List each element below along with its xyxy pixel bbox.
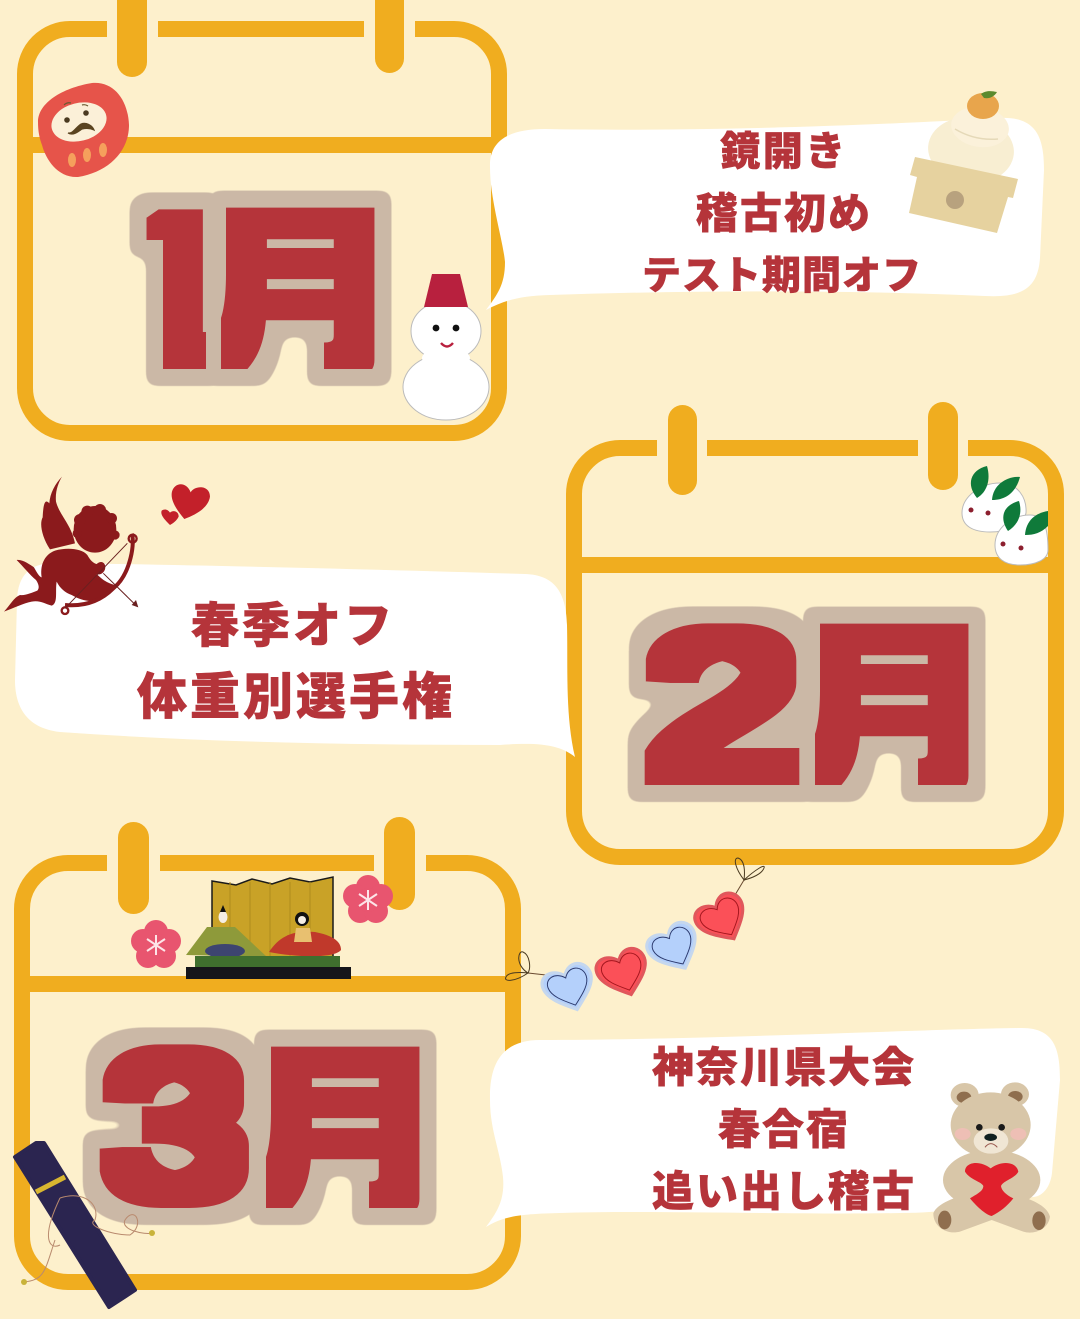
- garland: string of hearts: [506, 858, 764, 1018]
- panel: January calendar: [25, 0, 499, 433]
- speech bubble: March: [486, 1028, 1060, 1227]
- month label: 2月: 月: [779, 616, 1004, 795]
- month label: 3月: 3: [104, 1014, 246, 1238]
- month label: 1月: 1: [121, 178, 232, 401]
- month label: 2月: 2: [645, 594, 799, 817]
- panel: March calendar: [15, 817, 513, 1307]
- text: January events: 稽古初め: [696, 190, 872, 237]
- month label: 3月: 3: [104, 1014, 246, 1238]
- icon: floating hearts: [161, 484, 210, 525]
- text: March events: 追い出し稽古: [652, 1168, 916, 1215]
- icon: plum flower left: [131, 920, 181, 968]
- text: February events: 春季オフ: [191, 600, 395, 653]
- text: February events: [137, 600, 455, 725]
- month label: 3月: 月: [230, 1039, 455, 1218]
- heart: red: [690, 888, 756, 951]
- heart: blue: [643, 918, 707, 980]
- icon: plum flower right: [343, 875, 393, 923]
- month label: 2月: [627, 606, 986, 802]
- calendar frame: [574, 402, 1056, 857]
- calendar frame: [22, 817, 513, 1282]
- speech bubble: February: [15, 563, 575, 757]
- heart: blue: [539, 960, 601, 1018]
- text: March events: 春合宿: [718, 1106, 850, 1153]
- speech bubble: January: [486, 118, 1044, 310]
- text: January events: テスト期間オフ: [642, 255, 922, 298]
- icon: snow rabbits: [962, 466, 1048, 565]
- text: February events: 体重別選手権: [137, 669, 455, 725]
- text: January events: [642, 130, 922, 298]
- icon: hina dolls: [186, 877, 351, 979]
- panel: February calendar: [574, 402, 1056, 857]
- icon: snowman: [403, 274, 489, 420]
- month label: 2月: 月: [779, 616, 1004, 795]
- icon: graduation scroll: [15, 1143, 155, 1307]
- month label: 1月: [129, 190, 392, 386]
- icon: kagami mochi: [909, 91, 1018, 233]
- month label: 3月: [82, 1027, 437, 1226]
- month label: 1月: 1: [121, 178, 232, 401]
- icon: teddy bear with heart: [933, 1082, 1050, 1233]
- text: March events: [652, 1044, 916, 1215]
- month label: 3月: 月: [230, 1039, 455, 1218]
- heart: red: [593, 945, 655, 1003]
- text: January events: 鏡開き: [720, 130, 848, 174]
- calendar frame: [25, 0, 499, 433]
- month label: 2月: 2: [645, 594, 799, 817]
- icon: cupid with bow: [4, 477, 138, 614]
- month label: 1月: 月: [185, 200, 410, 379]
- text: March events: 神奈川県大会: [652, 1044, 916, 1091]
- month label: 1月: 月: [185, 200, 410, 379]
- icon: daruma: [38, 83, 129, 177]
